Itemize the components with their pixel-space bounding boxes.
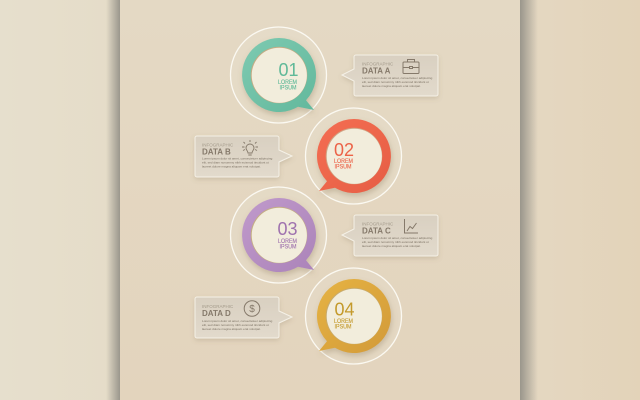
callout: data A: DATA A [362,66,391,76]
step 04 bubble: IPSUM [334,323,352,330]
central panel [120,0,520,400]
label 02: LOREM [334,158,353,165]
label 01: LOREM [278,79,297,86]
callout: data D: laoreet dolore magna aliquam erat volutpat. [202,327,261,331]
callout: data A: Lorem ipsum dolor sit amet, consectetuer adipiscing [362,76,433,80]
callout: data C: elit, sed diam nonummy nibh euismod tincidunt ut [362,240,429,244]
number 04: 04 [334,300,355,320]
step 04 bubble [306,268,402,364]
left panel shadow [106,0,120,400]
callout: data D: Lorem ipsum dolor sit amet, consectetuer adipiscing [202,319,273,323]
step 03 bubble: IPSUM [280,243,296,250]
background left strip [0,0,120,400]
callout: data B: laoreet dolore magna aliquam erat volutpat. [202,164,261,168]
callout: data A: elit, sed diam nonummy nibh euismod tincidunt ut [362,80,429,84]
callout: data B: DATA B [202,148,231,156]
icon: light bulb [242,140,258,155]
right panel shadow [520,0,538,400]
callout: data D: elit, sed diam nonummy nibh euismod tincidunt ut [202,323,269,327]
callout: data D [195,297,292,338]
callout: data A: laoreet dolore magna aliquam erat volutpat. [362,84,421,88]
icon: dollar coin: $ [249,304,255,315]
step 02 bubble [306,108,402,204]
background right strip [520,0,640,400]
callout: data B [195,136,292,177]
step 02 bubble: IPSUM [334,163,352,170]
number 02: 02 [334,140,354,160]
callout: data C: laoreet dolore magna aliquam erat volutpat. [362,244,421,248]
step 01 bubble [230,27,326,123]
step 03 bubble [230,187,326,283]
callout: data B: INFOGRAPHIC [202,142,234,148]
callout: data C: INFOGRAPHIC [362,222,394,226]
callout: data C: DATA C [362,226,391,236]
callout: data D: INFOGRAPHIC [202,304,234,309]
callout: data C [342,215,438,256]
icon: line chart [404,219,418,233]
callout: data C: Lorem ipsum dolor sit amet, consectetuer adipiscing [362,236,433,240]
callout: data A [342,55,438,96]
number 03: 03 [277,219,298,239]
label 04: LOREM [334,318,353,325]
callout: data A: INFOGRAPHIC [362,62,394,66]
step 01 bubble: IPSUM [280,84,296,92]
icon: briefcase [403,60,419,74]
callout: data B: Lorem ipsum dolor sit amet, consectetuer adipiscing [202,156,273,160]
callout: data D: DATA D [202,309,231,318]
label 03: LOREM [278,238,297,245]
number 01: 01 [278,60,299,80]
callout: data B: elit, sed diam nonummy nibh euismod tincidunt ut [202,160,269,164]
